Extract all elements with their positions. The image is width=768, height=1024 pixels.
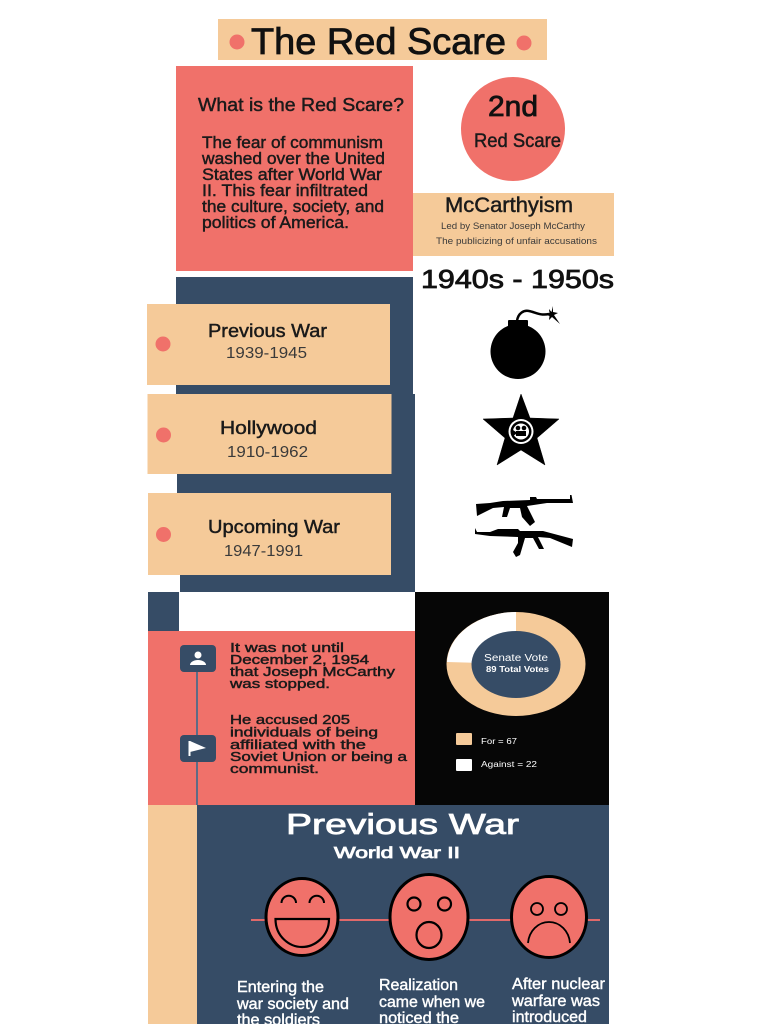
panel: senate vote: [415, 592, 609, 805]
text: December 1954: December 2, 1954: [230, 652, 369, 667]
card: hollywood: Hollywood: [220, 418, 317, 438]
card: previous war: 1939-1945: [226, 345, 307, 362]
panel: what is the red scare: II. This fear infiltrated: [202, 182, 368, 200]
title banner: The Red Scare: [251, 21, 506, 62]
card: upcoming war: [148, 493, 391, 575]
panel: McCarthyism: Led by Senator Joseph McCarthy: [441, 221, 585, 232]
icon: bomb: [490, 306, 560, 379]
badge: 2nd red scare: Red Scare: [474, 131, 561, 152]
panel: what is the red scare: What is the Red Scare?: [198, 95, 404, 115]
text: December 1954: was stopped.: [229, 676, 330, 691]
card: upcoming war: 1947-1991: [224, 543, 303, 560]
beige side strip: [148, 805, 197, 1024]
navy corner square: [148, 592, 179, 631]
panel: what is the red scare: washed over the United: [201, 150, 385, 168]
date range heading: 1940s - 1950s: [421, 264, 614, 294]
panel: McCarthyism: The publicizing of unfair accusations: [436, 236, 597, 247]
card: hollywood: [148, 394, 392, 474]
text: realization: [379, 977, 485, 1024]
text: accusations: individuals of being: [230, 724, 378, 740]
badge: 2nd red scare: 2nd: [488, 91, 538, 123]
text: accusations: communist.: [230, 761, 319, 776]
text: nuclear warfare: [511, 976, 605, 1024]
text: December 1954: It was not until: [230, 640, 344, 655]
icon: flag: [180, 735, 216, 762]
donut chart: 89 Total Votes: [486, 665, 550, 674]
donut chart: Senate Vote: [484, 653, 549, 664]
panel: McCarthyism: [413, 193, 614, 256]
panel: McCarthyism: McCarthyism: [445, 194, 573, 217]
icon: hollywood star: [483, 394, 559, 465]
panel: what is the red scare: States after World War: [202, 166, 383, 184]
badge: 2nd red scare: [461, 77, 565, 181]
text: December 1954: that Joseph McCarthy: [230, 664, 396, 679]
icon: sad face: [512, 876, 586, 958]
panel: McCarthy timeline: [148, 631, 415, 805]
legend: For = 67: [481, 737, 518, 746]
legend: [456, 733, 538, 771]
text: accusations: He accused 205: [230, 712, 350, 727]
icon: person: [180, 645, 216, 672]
text: nuclear warfare: After nuclear: [512, 976, 605, 993]
text: December 1954: [229, 640, 396, 691]
panel: what is the red scare: [176, 66, 413, 271]
panel: what is the red scare: the culture, society, and: [202, 198, 384, 216]
text: entering the war: [236, 979, 349, 1024]
icon: crossed rifles: [475, 495, 573, 557]
text: accusations: affiliated with the: [230, 737, 366, 752]
card: hollywood: 1910-1962: [227, 444, 308, 461]
text: realization: Realization: [379, 977, 458, 994]
panel: previous war detail: Previous War: [286, 809, 519, 841]
text: entering the war: war society and: [236, 996, 349, 1013]
card: upcoming war: Upcoming War: [208, 517, 340, 537]
navy backing panel: [176, 277, 415, 592]
card: previous war: [147, 304, 390, 385]
text: nuclear warfare: warfare was: [511, 993, 600, 1010]
card: previous war: Previous War: [208, 321, 327, 341]
panel: what is the red scare: politics of America.: [202, 214, 349, 232]
icon: shocked face: [390, 874, 468, 960]
panel: what is the red scare: The fear of communism: [202, 134, 383, 152]
text: accusations: Soviet Union or being a: [230, 749, 408, 764]
panel: previous war detail: World War II: [334, 845, 460, 862]
text: entering the war: Entering the: [237, 979, 324, 996]
donut chart: [446, 612, 586, 716]
legend: Against = 22: [481, 760, 538, 769]
panel: previous war detail: [197, 805, 609, 1024]
text: accusations: [230, 712, 408, 776]
icon: happy face: [266, 878, 338, 956]
text: realization: came when we: [379, 994, 485, 1011]
